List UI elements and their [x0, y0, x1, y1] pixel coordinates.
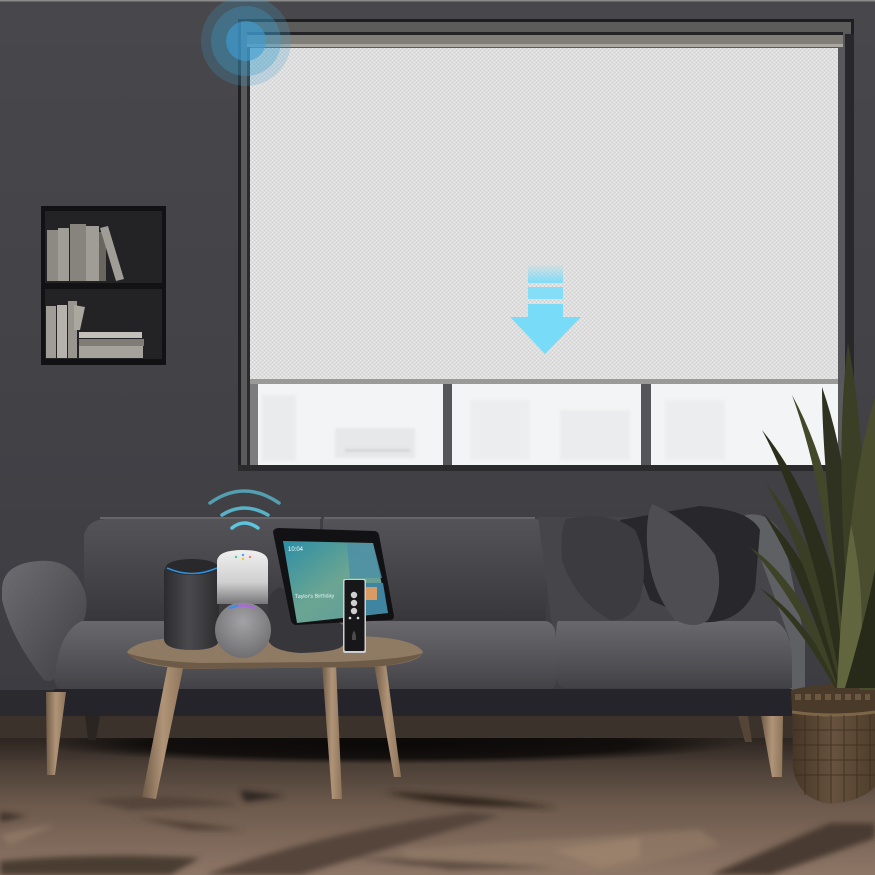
- shade bottom rail: [250, 379, 838, 384]
- window frame: [238, 19, 854, 474]
- roller shade fabric: [250, 48, 838, 380]
- sofa pillows: [562, 504, 760, 625]
- coffee table: [127, 636, 423, 799]
- icon: wifi signal: [210, 491, 279, 528]
- sofa seat cushions: [54, 621, 556, 690]
- sofa back: [84, 519, 320, 625]
- device: smart display: [273, 528, 394, 625]
- sofa legs: [46, 692, 66, 775]
- sofa right arm: [745, 514, 805, 690]
- sofa: [2, 504, 805, 777]
- books: upper shelf: [47, 224, 124, 281]
- sofa left arm: [2, 561, 87, 681]
- device: smart display base: [268, 587, 343, 653]
- arrow: shade moving down: [510, 265, 581, 354]
- device: white smart speaker: [217, 550, 268, 604]
- device: black smart speaker: [164, 559, 219, 650]
- device: grey mini speaker: [215, 602, 271, 658]
- icon: wireless signal from shade motor: [201, 0, 291, 86]
- bookshelf: [41, 206, 166, 365]
- plant leaves: [750, 343, 875, 690]
- device: remote control: [343, 579, 366, 653]
- plant pot: [791, 684, 875, 804]
- window view below shade: [238, 384, 854, 471]
- device: smart display: 10:04: [288, 547, 304, 553]
- books: lower shelf: [46, 301, 144, 358]
- device: smart display: Taylor's Birthday: [295, 593, 335, 600]
- wooden floor and skirting: [0, 690, 875, 875]
- shade headrail cassette: [241, 22, 851, 47]
